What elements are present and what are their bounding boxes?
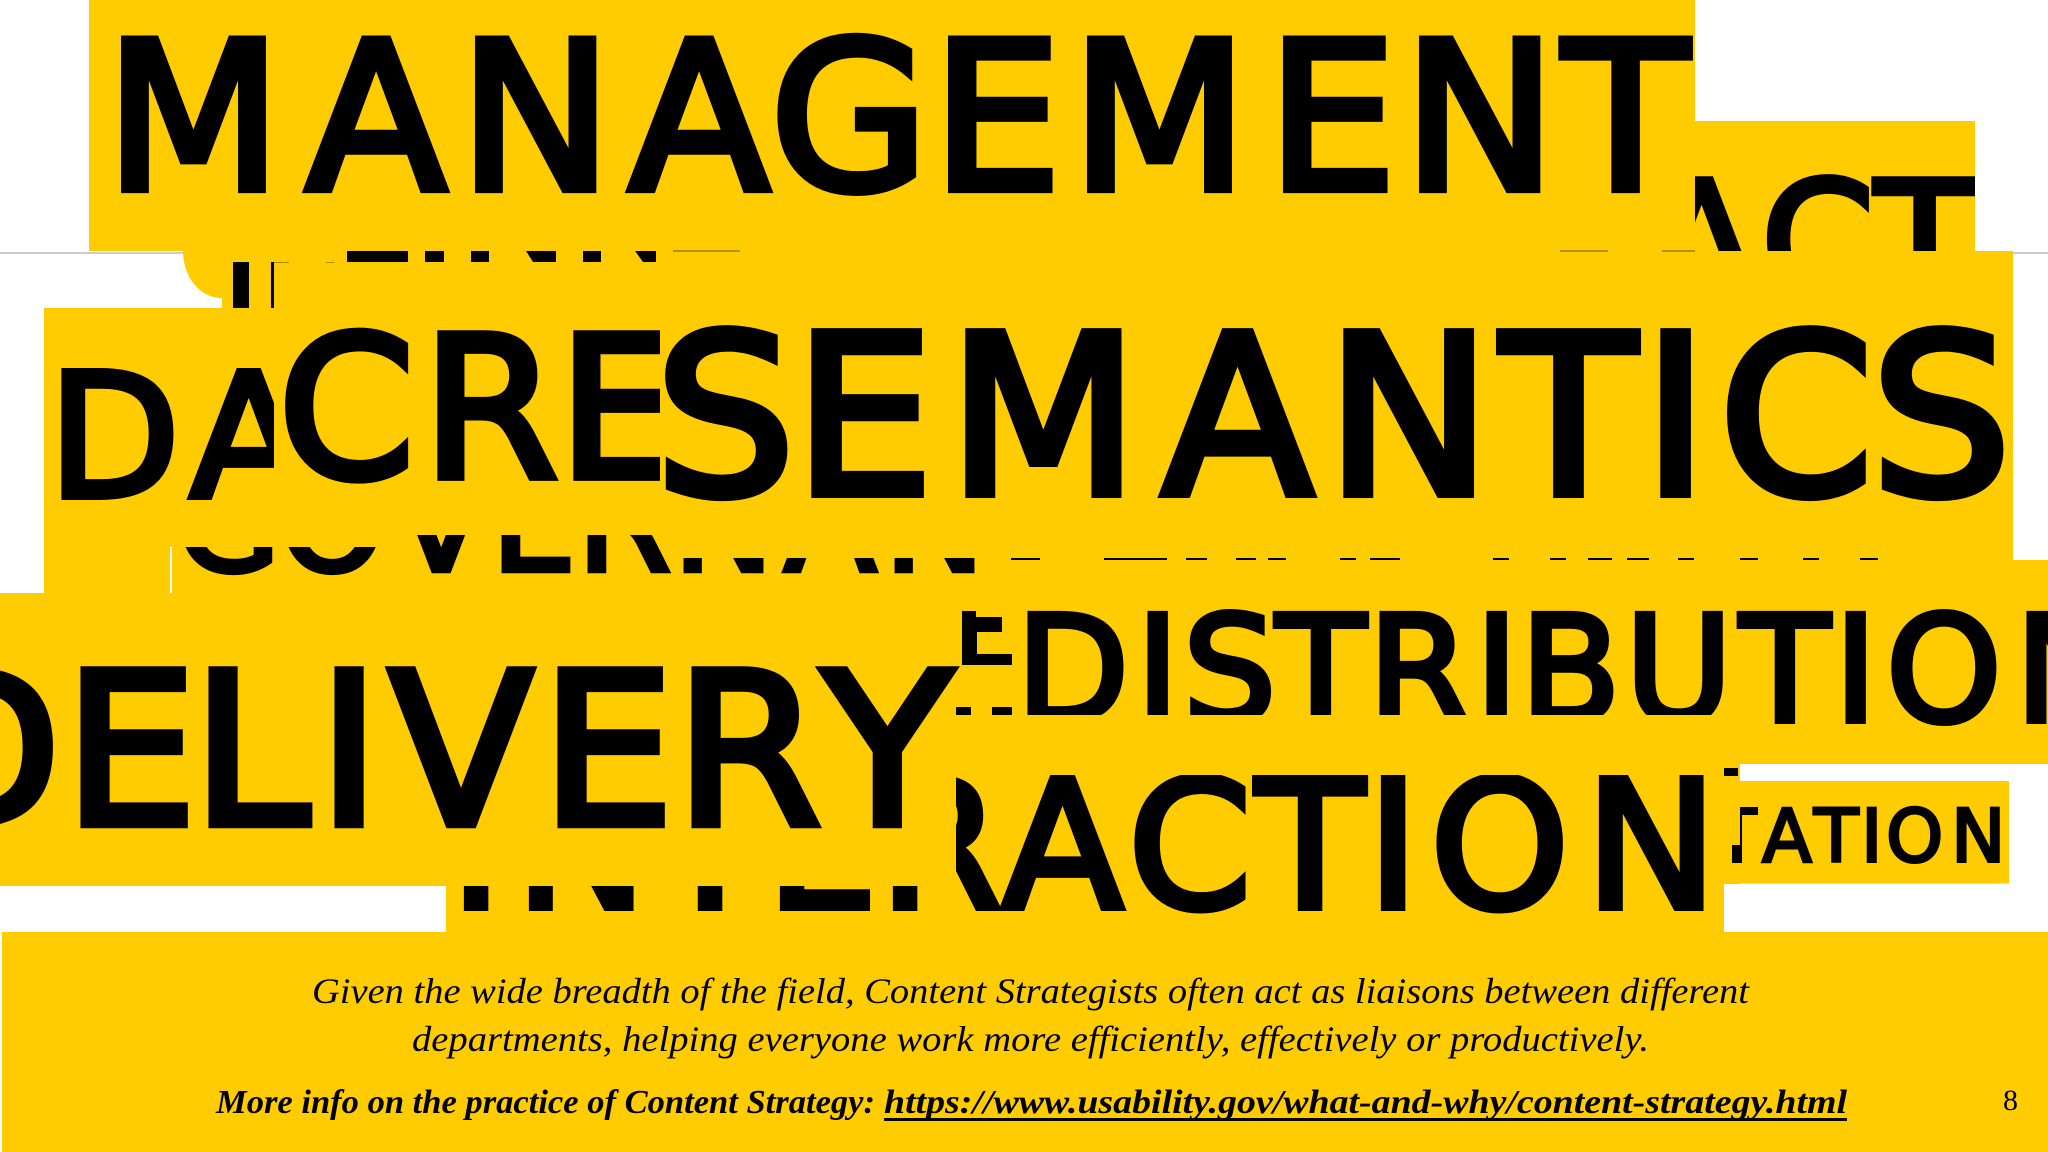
page number: 8 — [2003, 1084, 2018, 1117]
word fragment: data: DA — [48, 338, 307, 538]
link text: https://www.usability.gov/what-and-why/content-strategy.html — [884, 1084, 1848, 1121]
word fragment: cre: CRE — [278, 296, 682, 524]
heading word: semantics: SEMANTICS — [655, 290, 2011, 547]
hidden word fragments under headline row — [233, 250, 1695, 308]
letter fragment: t — [1732, 807, 1758, 863]
letter fragment dashes — [956, 707, 1012, 715]
word fragment: ation: ATION — [1762, 794, 2005, 880]
word fragment: governance: GOVERNANCE — [176, 446, 1185, 602]
letter fragment: e — [962, 611, 1012, 665]
heading word: management: MANAGEMENT — [105, 0, 1689, 238]
heading word: interaction: INTERACTION — [450, 744, 1717, 950]
link underline — [884, 1118, 1847, 1121]
hidden word dashes — [1011, 558, 1878, 560]
more info line — [215, 1084, 1848, 1121]
body text — [312, 971, 1750, 1059]
body line one: Given the wide breadth of the field, Content Strategists often act as liaisons between different — [312, 971, 1750, 1011]
white vertical sliver — [170, 547, 172, 593]
body line two: departments, helping everyone work more efficiently, effectively or productively. — [412, 1019, 1649, 1059]
more info label: More info on the practice of Content Strategy: — [215, 1084, 875, 1121]
word fragment: impact: ACT — [1646, 148, 1975, 337]
letter fragment: square — [1724, 768, 1738, 776]
divider — [0, 252, 184, 254]
